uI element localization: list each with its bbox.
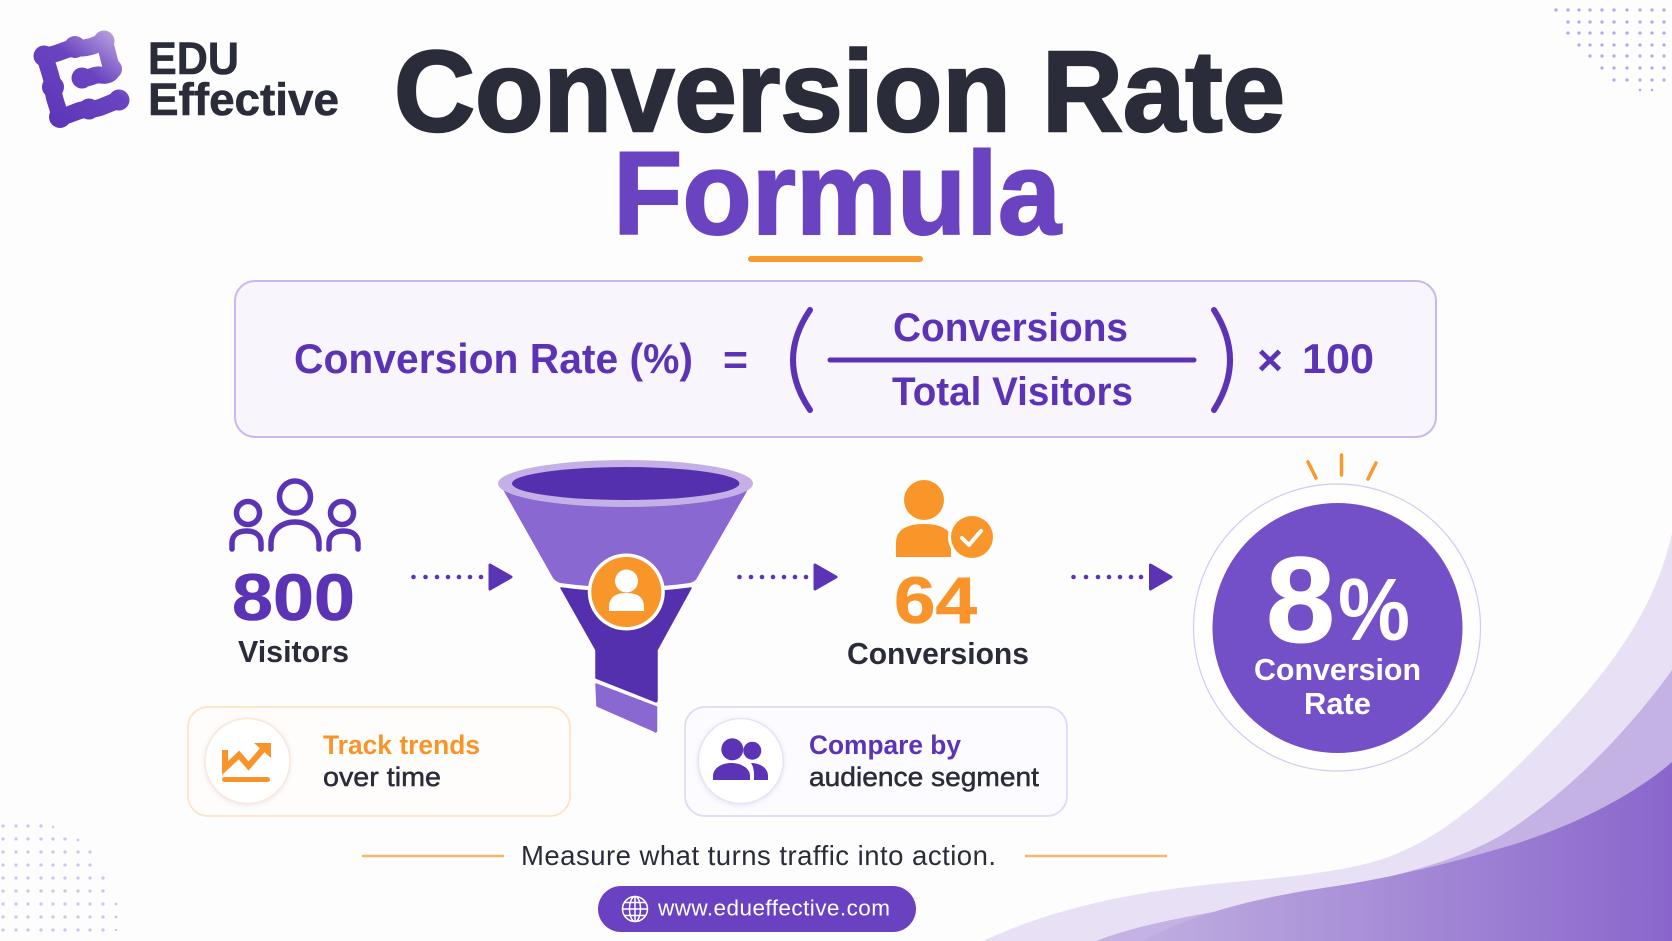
- card text: Track trends: [323, 730, 480, 760]
- card text: [809, 730, 1040, 792]
- conversions number: 64: [894, 563, 977, 637]
- right bracket: [1214, 310, 1230, 410]
- icon: trend chart: [205, 718, 290, 804]
- arrow: funnel to conversions: [737, 565, 836, 589]
- icon: people: [232, 481, 358, 549]
- result badge: 8%: [1194, 455, 1480, 771]
- arrow: conversions to rate: [1071, 565, 1171, 589]
- logo: EDU Effective: [34, 30, 339, 128]
- icon: person with check: [896, 480, 996, 561]
- icon: globe: [622, 896, 648, 922]
- website pill: [598, 886, 916, 932]
- arrow: visitors to funnel: [411, 565, 511, 589]
- percent sign: %: [1338, 560, 1410, 659]
- title line two: Formula: [613, 128, 1062, 260]
- conversions block: [847, 480, 1029, 671]
- visitors label: Visitors: [238, 634, 349, 669]
- card: compare by audience segment: [685, 707, 1067, 816]
- logo wordmark: [148, 33, 339, 125]
- background waves: [983, 533, 1672, 941]
- card text: Compare by: [809, 730, 961, 760]
- fraction line: [830, 358, 1194, 362]
- logo wordmark: EDU: [148, 33, 239, 84]
- funnel spout: [596, 684, 656, 732]
- logo mark: [34, 30, 130, 128]
- multiplier 100: 100: [1302, 335, 1374, 382]
- dot pattern top right: [1554, 8, 1666, 91]
- result caption: [1254, 652, 1421, 721]
- left bracket: [793, 310, 810, 410]
- website url: www.edueffective.com: [657, 896, 890, 920]
- icon: audience people: [698, 718, 783, 804]
- funnel lower stem: [561, 588, 691, 702]
- tagline: Measure what turns traffic into action.: [521, 840, 996, 871]
- visitors number: 800: [232, 560, 355, 634]
- fraction: [830, 306, 1194, 414]
- numerator: Conversions: [893, 306, 1128, 350]
- inner disc: [1212, 503, 1462, 753]
- result number: 8: [1266, 532, 1335, 668]
- multiply sign: ×: [1257, 336, 1283, 385]
- funnel upper cone: [501, 486, 750, 588]
- panel: formula: [235, 281, 1436, 437]
- title: [394, 28, 1285, 262]
- card: track trends: [188, 707, 570, 816]
- orange sparkle rays: [1308, 455, 1376, 479]
- result caption: Rate: [1304, 686, 1371, 721]
- funnel opening: [512, 467, 739, 500]
- card text: over time: [323, 762, 441, 792]
- funnel person badge: [588, 554, 665, 630]
- result caption: Conversion: [1254, 652, 1421, 687]
- dot pattern bottom left: [1, 824, 117, 932]
- card text: [323, 730, 480, 792]
- funnel: [498, 460, 753, 732]
- conversions label: Conversions: [847, 636, 1029, 671]
- visitors block: [232, 481, 358, 669]
- formula label: Conversion Rate (%): [294, 335, 693, 382]
- denominator: Total Visitors: [892, 370, 1133, 414]
- card text: audience segment: [809, 762, 1040, 792]
- logo wordmark: Effective: [148, 74, 339, 125]
- title underline: [748, 256, 923, 262]
- title line one: Conversion Rate: [394, 28, 1285, 156]
- equals sign: =: [723, 336, 748, 383]
- funnel rim: [498, 460, 753, 507]
- outer ring: [1194, 484, 1480, 771]
